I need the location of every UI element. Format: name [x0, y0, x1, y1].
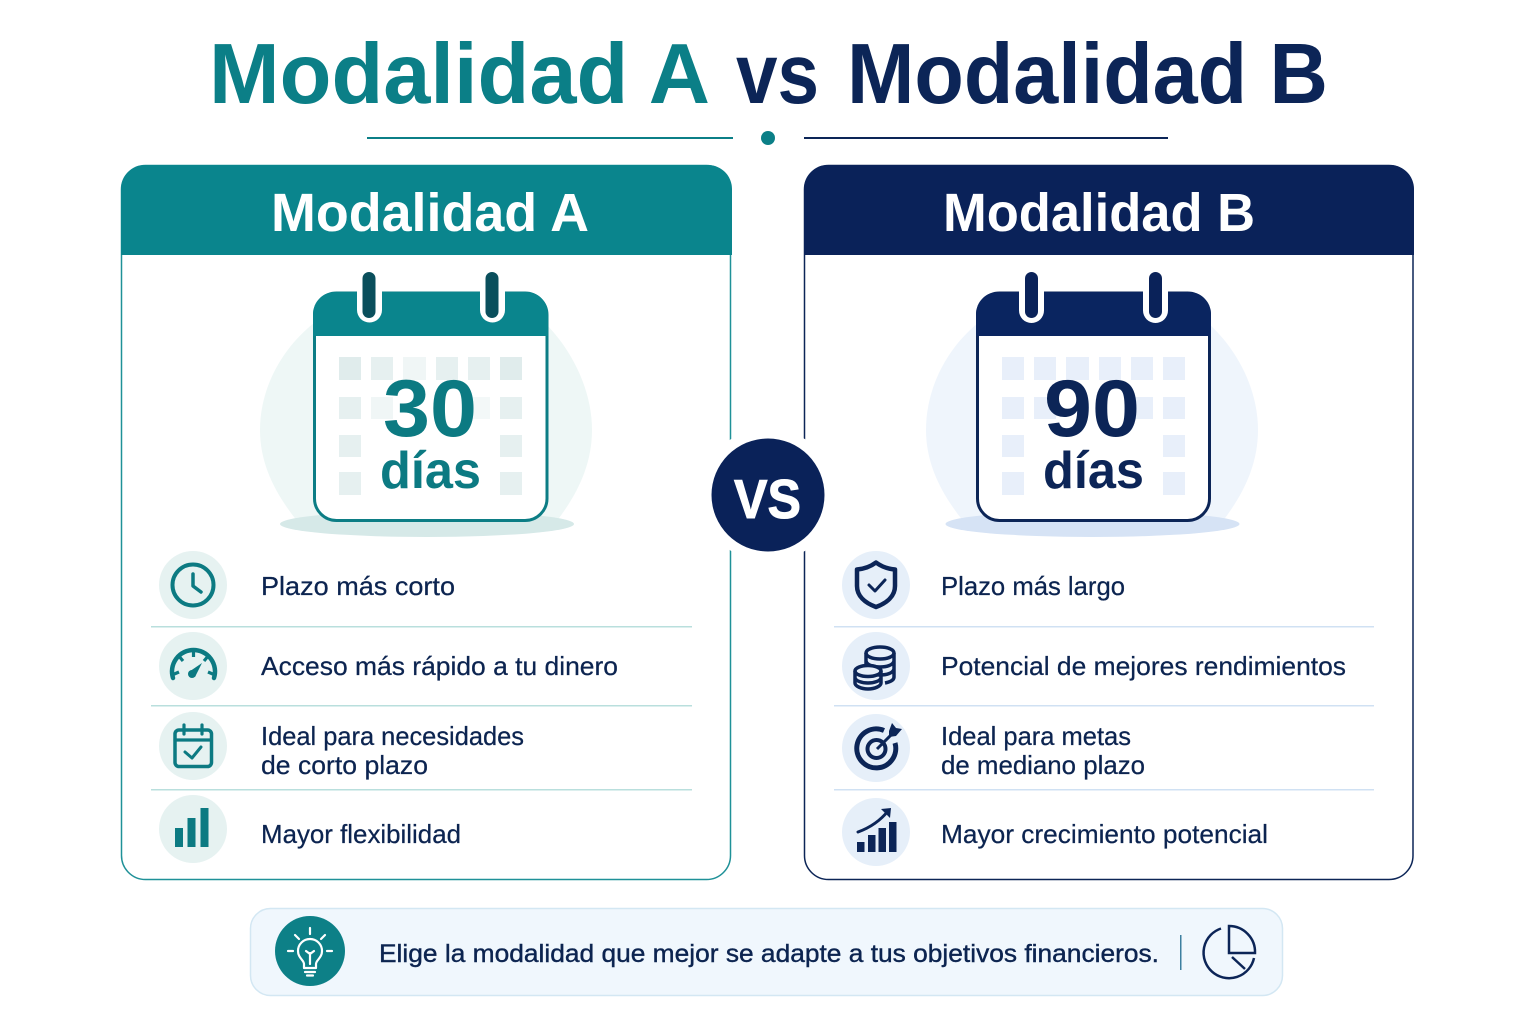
title: vs [736, 27, 819, 122]
panel: Modalidad A [121, 165, 732, 880]
text: Ideal para necesidades: de corto plazo [261, 750, 428, 780]
row dividers B [834, 626, 1374, 790]
text: Mayor crecimiento potencial: Mayor crecimiento potencial [941, 819, 1268, 849]
icon: calendar check [159, 712, 227, 780]
panel A header: Modalidad A [271, 183, 589, 243]
icon: light bulb [275, 916, 345, 986]
icon: coins [842, 632, 910, 700]
panel B header: Modalidad B [943, 183, 1255, 243]
icon: target [842, 714, 910, 782]
title: Modalidad A [209, 27, 710, 122]
text: Ideal para necesidades [261, 721, 524, 780]
icon: bar chart [159, 795, 227, 863]
text: Potencial de mejores rendimientos: Potencial de mejores rendimientos [941, 651, 1346, 681]
text: Ideal para metas [941, 721, 1145, 780]
icon: clock [159, 551, 227, 619]
text: Plazo más largo: Plazo más largo [941, 571, 1125, 601]
text: Mayor flexibilidad: Mayor flexibilidad [261, 819, 461, 849]
text: Ideal para metas: Ideal para metas [941, 721, 1131, 751]
calendar: 90 días: 90 [1044, 364, 1140, 454]
icon: speedometer [159, 632, 227, 700]
VS badge: VS [734, 468, 801, 530]
text: callout message: Elige la modalidad que mejor se adapte a tus objetivos financieros. [379, 940, 1159, 968]
calendar: 30 días [260, 270, 592, 537]
callout separator [1180, 935, 1182, 970]
icon: shield [842, 551, 910, 619]
callout bar [250, 908, 1282, 996]
VS badge [701, 428, 835, 562]
icon: growth chart [842, 798, 910, 866]
icon: pie chart [1204, 926, 1255, 978]
row dividers A [151, 626, 692, 790]
title: Modalidad B [847, 27, 1328, 122]
title divider [367, 131, 1168, 145]
text: Acceso más rápido: Acceso más rápido a tu dinero [261, 651, 618, 681]
calendar: 30 días: 30 [383, 364, 477, 454]
calendar: 90 días: días [1043, 442, 1144, 500]
panel A header [121, 165, 732, 255]
calendar: 30 días: días [380, 442, 481, 500]
panel: Modalidad B [804, 165, 1414, 880]
text: Ideal para necesidades: Ideal para necesidades [261, 721, 524, 751]
text: Ideal para metas: de mediano plazo [941, 750, 1145, 780]
title [209, 27, 1328, 122]
calendar: 90 días [926, 270, 1258, 537]
text: Plazo más corto: Plazo más corto [261, 571, 455, 601]
panel B header [804, 165, 1414, 255]
